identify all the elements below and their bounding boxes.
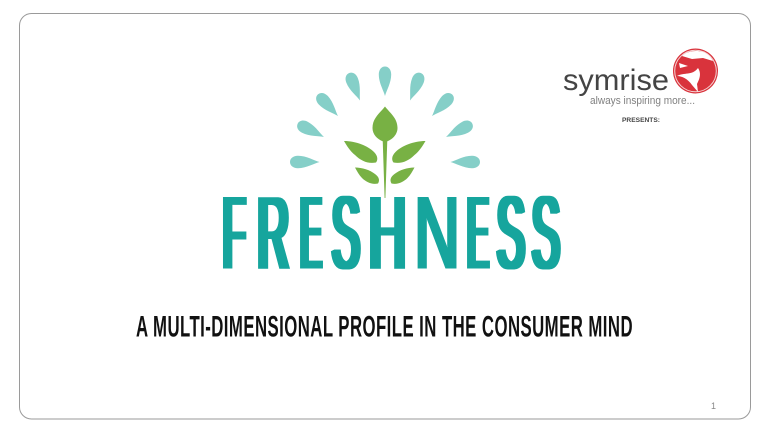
title: FRESHNESS: S bbox=[332, 174, 360, 291]
presents label: PRESENTS: bbox=[622, 117, 660, 124]
page number: 1 bbox=[711, 401, 716, 411]
icon: freshness droplets bbox=[290, 66, 480, 168]
brand name: symrise bbox=[563, 64, 669, 97]
title: FRESHNESS: S bbox=[497, 174, 525, 291]
title: FRESHNESS: F bbox=[223, 174, 245, 291]
icon: symrise dragon emblem bbox=[673, 48, 718, 94]
icon: green leaf sprig bbox=[344, 106, 426, 198]
title: FRESHNESS: N bbox=[414, 175, 460, 292]
title: FRESHNESS bbox=[223, 174, 560, 292]
title: FRESHNESS: E bbox=[300, 176, 321, 292]
title: FRESHNESS: S bbox=[532, 174, 560, 291]
title: FRESHNESS: H bbox=[369, 176, 406, 291]
tagline: always inspiring more... bbox=[590, 95, 695, 107]
title: FRESHNESS: E bbox=[468, 176, 488, 292]
logo: symrise bbox=[563, 48, 718, 107]
title: FRESHNESS: R bbox=[258, 175, 289, 291]
